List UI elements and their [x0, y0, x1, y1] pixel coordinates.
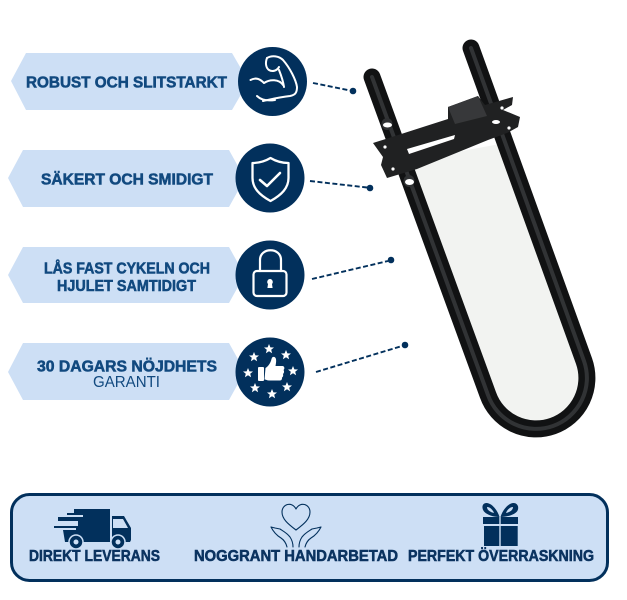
- icon badge: flexed arm: [238, 47, 307, 116]
- panel: feature lock: [8, 240, 304, 310]
- label: safe: SÄKERT OCH SMIDIGT: [41, 172, 214, 188]
- connector: safe: [310, 181, 373, 191]
- icon badge: padlock: [236, 240, 304, 310]
- icon: gift box: [482, 503, 518, 546]
- banner: lock: [8, 247, 239, 303]
- icon badge: shield: [236, 144, 304, 212]
- panel: feature robust: [11, 47, 307, 116]
- label: robust: ROBUST OCH SLITSTARKT: [26, 74, 228, 92]
- panel: feature safe: [8, 144, 304, 212]
- icon: truck: [54, 509, 131, 549]
- benefit: delivery: [29, 509, 160, 565]
- icon badge: thumbs up with stars: [236, 338, 304, 406]
- panel: benefits: [12, 494, 608, 580]
- centre bracket: [448, 96, 487, 124]
- icon: heart and hands: [271, 504, 321, 547]
- label: delivery: DIREKT LEVERANS: [29, 548, 160, 565]
- connector: guarantee: [316, 342, 408, 372]
- connector: robust: [313, 83, 356, 94]
- mounting plates: [373, 96, 520, 178]
- benefit: gift: [408, 503, 594, 565]
- banner: safe: [8, 150, 239, 207]
- label: lock line 2: HJULET SAMTIDIGT: [57, 278, 196, 295]
- lock interior: [403, 143, 587, 429]
- connector: lock: [312, 257, 394, 279]
- slot: [407, 135, 455, 154]
- U-shaped shackle: [372, 48, 587, 429]
- label: gift: PERFEKT ÖVERRASKNING: [408, 548, 594, 565]
- bolt holes: [382, 106, 511, 187]
- banner: robust: [11, 53, 243, 110]
- label: guarantee line 2: GARANTI: [93, 374, 160, 391]
- label: handmade: NOGGRANT HANDARBETAD: [194, 548, 398, 565]
- product: U-lock: [372, 48, 587, 429]
- panel: feature guarantee: [8, 338, 304, 406]
- shackle highlight: [372, 48, 587, 429]
- benefit: handmade: [194, 504, 398, 565]
- label: guarantee: 30 DAGARS NÖJDHETS: [37, 358, 217, 376]
- banner: guarantee: [8, 343, 239, 400]
- label: lock: LÅS FAST CYKELN OCH: [44, 260, 210, 278]
